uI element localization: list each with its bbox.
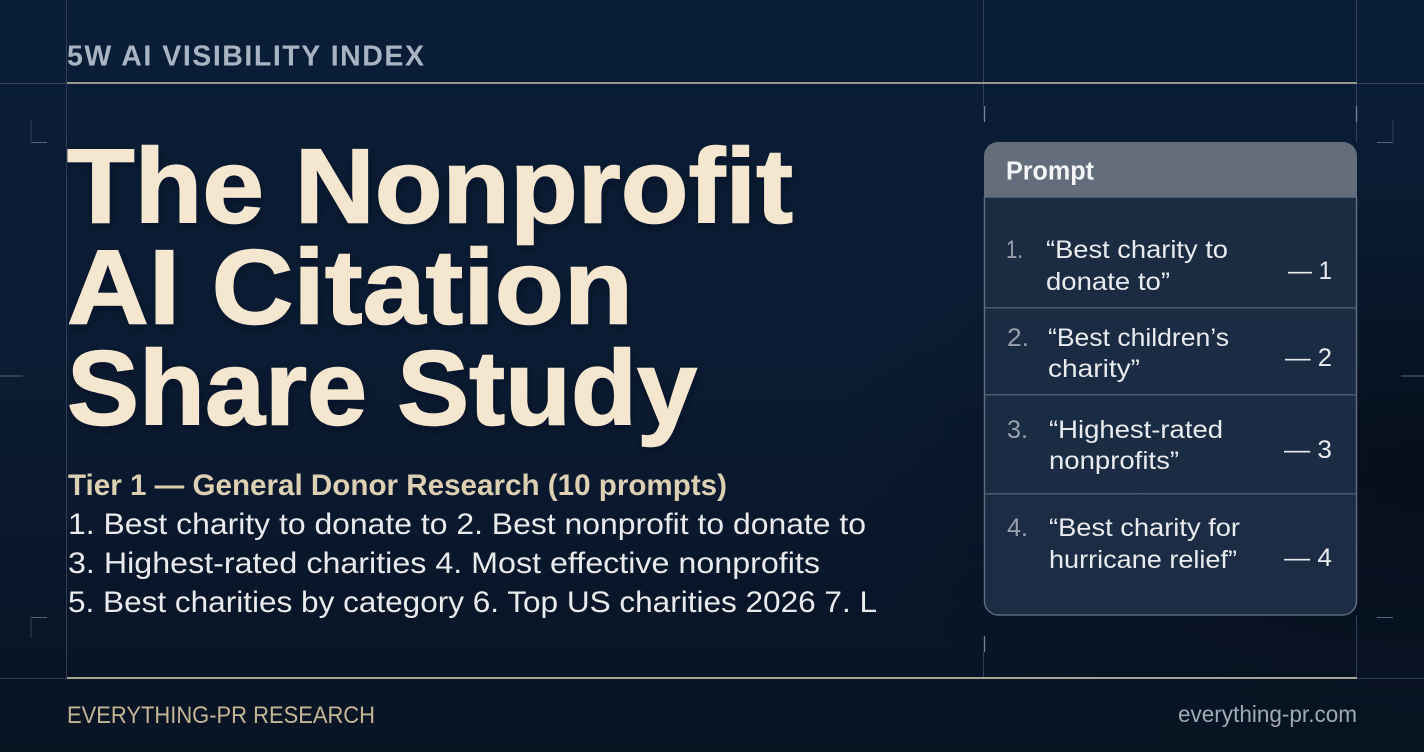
row 2: — 2 xyxy=(1285,344,1332,372)
footer: website: everything-pr.com xyxy=(1178,701,1357,727)
row 2 xyxy=(1007,324,1332,383)
table body xyxy=(984,197,1356,615)
title xyxy=(67,127,793,447)
row 2: “Best children’s xyxy=(1048,324,1229,352)
tier prompt list: 1. Best charity to donate to 2. Best nonprofit to donate to xyxy=(68,508,866,541)
row 3 xyxy=(1007,416,1332,475)
kicker: 5W AI Visibility Index: 5W AI VISIBILITY INDEX xyxy=(67,40,424,72)
row 2: 2. xyxy=(1007,324,1029,352)
row 1: donate to” xyxy=(1046,268,1170,296)
footer: source: EVERYTHING-PR RESEARCH xyxy=(67,702,375,729)
title: AI Citation xyxy=(67,228,633,346)
row 3: — 3 xyxy=(1284,436,1332,464)
row 4 xyxy=(1007,514,1332,574)
tier heading: Tier 1 — General Donor Research (10 prompts) xyxy=(68,469,727,502)
row 2: charity” xyxy=(1048,355,1140,383)
row 1: “Best charity to xyxy=(1046,236,1228,264)
table header xyxy=(984,142,1357,197)
title: Share Study xyxy=(67,329,697,447)
row 4: “Best charity for xyxy=(1049,514,1240,542)
panel: prompt table xyxy=(984,142,1357,615)
row 4: — 4 xyxy=(1284,544,1332,572)
tier prompt list xyxy=(68,508,877,619)
tier prompt list: 3. Highest-rated charities 4. Most effective nonprofits xyxy=(68,547,820,580)
row 1: — 1 xyxy=(1288,257,1332,285)
row 3: 3. xyxy=(1007,416,1028,444)
title: The Nonprofit xyxy=(67,127,793,245)
row 1: 1. xyxy=(1006,236,1023,264)
table header: Prompt xyxy=(1006,158,1095,186)
row 3: “Highest-rated xyxy=(1049,416,1223,444)
tier prompt list: 5. Best charities by category 6. Top US charities 2026 7. L xyxy=(68,586,877,619)
row 1 xyxy=(1006,236,1332,296)
row 3: nonprofits” xyxy=(1049,447,1179,475)
row 4: 4. xyxy=(1007,514,1028,542)
row dividers xyxy=(985,307,1356,494)
bottom rule xyxy=(67,677,1357,679)
row 4: hurricane relief” xyxy=(1049,546,1237,574)
top rule xyxy=(67,82,1357,84)
